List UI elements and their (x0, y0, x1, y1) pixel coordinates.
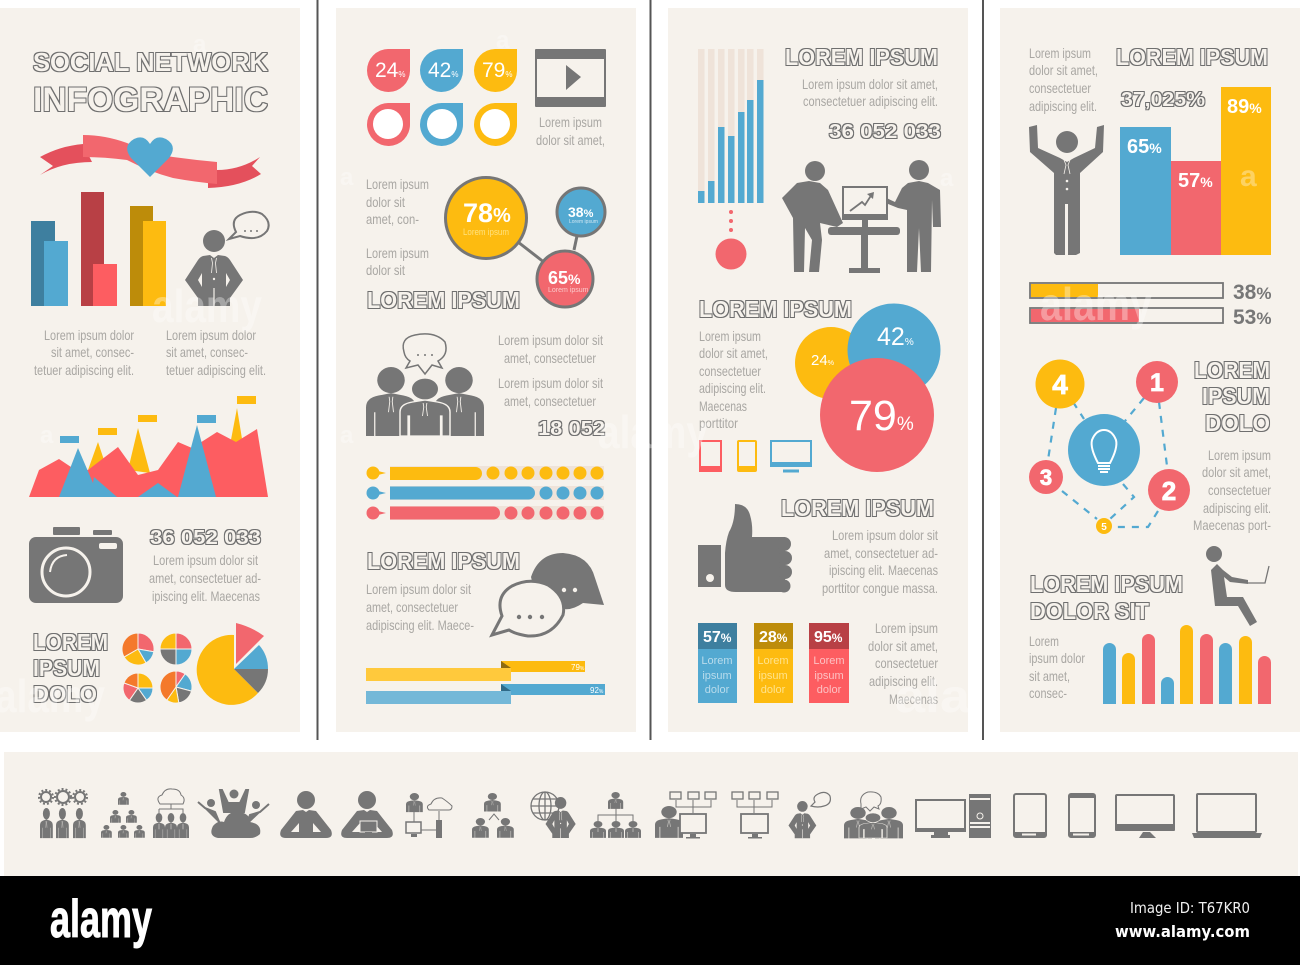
icon: people with gears (39, 789, 87, 838)
text block (868, 620, 938, 707)
icon: desktop computer (915, 794, 991, 838)
text block: consectetuer (1029, 80, 1091, 96)
stat card: 57% (698, 623, 737, 703)
heading: LOREM IPSUM (1030, 571, 1183, 597)
text block: group: amet, consectetuer (504, 393, 596, 409)
process diagram: 1 (1150, 369, 1164, 397)
text block: chat: amet, consectetuer (366, 599, 458, 615)
divider line 2 (650, 0, 652, 740)
icon: people group with speech bubble (366, 334, 484, 436)
heading: lorem ipsum dolo (33, 629, 108, 707)
text block: dolor sit amet, (868, 638, 938, 654)
bubble chart (795, 304, 940, 472)
watermarks: alamy (1040, 278, 1152, 330)
text block: sit amet, (1029, 668, 1070, 684)
bubble diagram: 38% (568, 204, 594, 220)
folded bars: 92% (590, 686, 604, 695)
bubble diagram: Lorem ipsum (569, 219, 598, 225)
panel: results and process (1000, 8, 1300, 732)
text block: video: Lorem ipsum (539, 114, 602, 130)
icon strip (4, 752, 1298, 876)
text block (802, 76, 938, 109)
text block: dolor sit amet, (699, 345, 768, 361)
icon: monitor (1115, 795, 1175, 838)
text block: chat (366, 581, 474, 633)
text block: video: dolor sit amet, (536, 132, 605, 148)
icon: thumbs up (698, 504, 792, 592)
text block: group (498, 332, 603, 409)
bar chart: 65 57 89 (1120, 87, 1271, 255)
text block: consectetuer adipiscing elit. (803, 93, 938, 109)
stat card: 95%: ipsum (814, 670, 844, 682)
text block: circles: dolor sit (366, 194, 405, 210)
bubble chart: 42% (877, 323, 914, 351)
process diagram: 3 (1040, 465, 1052, 490)
heading: IPSUM (1202, 383, 1270, 409)
icon: person, cloud and computer (406, 793, 452, 838)
text block: Lorem ipsum dolor sit (832, 527, 938, 543)
folded bars: 79% (571, 663, 585, 672)
column chart (698, 49, 764, 270)
watermarks: alamy (598, 406, 708, 458)
stat card: 28%: Lorem (757, 655, 789, 667)
heading (1194, 357, 1270, 436)
title: INFOGRAPHIC (33, 81, 268, 119)
progress bars: 38% (1233, 281, 1271, 304)
icon: camera (29, 527, 123, 603)
text block: consectetuer (1208, 482, 1271, 498)
heading: LOREM IPSUM (367, 548, 520, 574)
icon: monitor and network (732, 792, 778, 838)
pie chart: large (197, 623, 268, 705)
icons: devices (700, 441, 811, 471)
bubble diagram: 65% (548, 268, 581, 288)
stat card: 95%: dolor (817, 684, 842, 696)
text block (1029, 45, 1098, 114)
folded bars (366, 661, 605, 704)
watermarks: a (40, 422, 54, 449)
icon: org chart (590, 792, 641, 838)
text block: chat: adipiscing elit. Maece- (366, 617, 474, 633)
text block: Maecenas (889, 691, 938, 707)
text block (822, 527, 938, 596)
text block: right column: Lorem ipsum dolor (166, 327, 256, 343)
text block: camera description: amet, consectetuer ad- (149, 570, 261, 586)
area chart with flags (29, 396, 268, 497)
heading: LOREM IPSUM (367, 287, 520, 313)
icon: globe and person (531, 792, 576, 838)
icon: person with speech bubble (185, 212, 269, 306)
heading: lorem ipsum dolo: DOLO (33, 681, 97, 707)
panel: drops and circles (336, 8, 636, 732)
progress bars: 53% (1233, 306, 1271, 329)
icon: video player (535, 49, 606, 107)
image id: Image ID: T67KR0 (1130, 899, 1250, 917)
icon: three people hierarchy (472, 793, 514, 838)
text block: ipiscing elit. Maecenas (829, 562, 938, 578)
bubble chart: 24% (811, 352, 834, 369)
text block: left column: sit amet, consec- (51, 344, 134, 360)
icon: team celebrating over cloud (198, 790, 269, 838)
bar chart: 65 57 89: 57% (1178, 170, 1213, 192)
text block: dolor sit amet, (1029, 62, 1098, 78)
watermarks: alamy (152, 280, 262, 332)
text block: Lorem ipsum (875, 620, 938, 636)
title (33, 47, 268, 119)
number: 36 052 033 (829, 120, 941, 143)
text block: right column (166, 327, 266, 378)
title: SOCIAL NETWORK (33, 47, 268, 77)
number: 36 052 033 (150, 526, 261, 549)
process diagram: 4 (1052, 369, 1068, 400)
icon: businessman (280, 791, 332, 838)
bubble diagram: Lorem ipsum (548, 287, 589, 294)
website: www.alamy.com (1115, 922, 1250, 941)
drops with percentages (367, 49, 517, 146)
stat card: 57%: dolor (705, 684, 730, 696)
text block: circles: amet, con- (366, 211, 419, 227)
drops with percentages: 42% (428, 59, 458, 82)
text block (1029, 633, 1085, 701)
panel: business scene and circles (668, 8, 968, 732)
progress bars (1030, 281, 1271, 329)
icon: phone (1069, 794, 1095, 837)
stat card: 95%: 95% (814, 629, 843, 646)
watermarks (0, 27, 1257, 722)
pie charts: small (122, 633, 192, 703)
text block: consectetuer (875, 655, 938, 671)
bubble diagram: Lorem ipsum (463, 227, 509, 237)
text block: ipsum dolor (1029, 650, 1085, 666)
watermarks: a (940, 165, 954, 192)
text block: right column: sit amet, consec- (166, 344, 248, 360)
icon: people pyramid (101, 792, 145, 838)
text block: Lorem ipsum dolor sit amet, (802, 76, 938, 92)
divider line 1 (316, 0, 318, 740)
text block: right column: tetuer adipiscing elit. (166, 362, 266, 378)
stat card: 57%: 57% (703, 629, 732, 646)
icon: group with speech bubble (844, 792, 903, 838)
text block: camera description: Lorem ipsum dolor sit (153, 552, 258, 568)
text block: amet, consectetuer ad- (824, 545, 938, 561)
icon: person with arms raised (1029, 125, 1104, 255)
bubble chart: 79% (849, 392, 914, 440)
text block: camera description: ipiscing elit. Maecenas (152, 588, 260, 604)
icon: businessman with monitor (341, 791, 393, 838)
stat card: 95% (809, 623, 849, 703)
text block: adipiscing elit. (1203, 500, 1271, 516)
bar chart: 65 57 89: 65% (1127, 136, 1162, 158)
heading (1030, 571, 1183, 624)
bar chart: 65 57 89: 89% (1227, 96, 1262, 118)
stat card: 28% (754, 623, 793, 703)
bar chart: paired bars (31, 192, 166, 306)
text block: Maecenas port- (1193, 517, 1271, 533)
text block: adipiscing elit. (1029, 98, 1097, 114)
icon: chat bubbles (492, 553, 604, 636)
text block: Lorem (1029, 633, 1059, 649)
text block: circles (366, 176, 429, 278)
icon: two businessmen at chart monitor (782, 160, 941, 273)
text block: group: Lorem ipsum dolor sit (498, 332, 603, 348)
watermarks: ala (895, 670, 970, 722)
text block: dolor sit amet, (1202, 464, 1271, 480)
text block: porttitor (699, 415, 738, 431)
text block: video (536, 114, 605, 148)
process diagram: 5 (1101, 522, 1107, 533)
bubble diagram (446, 178, 605, 307)
text block: adipiscing elit. (699, 380, 766, 396)
heading: lorem ipsum dolo: IPSUM (33, 655, 100, 681)
text block: left column (34, 327, 134, 378)
text block: Lorem ipsum (1208, 447, 1271, 463)
text block: group: amet, consectetuer (504, 350, 596, 366)
stat card: 57%: ipsum (702, 670, 732, 682)
icon: ribbon with heart (40, 135, 261, 188)
text block: circles: Lorem ipsum (366, 245, 429, 261)
alamy logo: alamy (50, 890, 152, 949)
stat card: 28%: ipsum (758, 670, 788, 682)
process diagram (1029, 360, 1190, 534)
icon: laptop (1192, 794, 1262, 838)
number: 18 052 (538, 417, 605, 440)
text block: Lorem ipsum (1029, 45, 1091, 61)
text block: left column: tetuer adipiscing elit. (34, 362, 134, 378)
stat card: 57%: Lorem (701, 655, 733, 667)
process diagram: 2 (1162, 476, 1176, 506)
text block: circles: dolor sit (366, 262, 405, 278)
watermarks: a (1240, 160, 1257, 193)
heading: LOREM IPSUM (699, 296, 852, 322)
text block: consectetuer (699, 363, 761, 379)
divider line 3 (982, 0, 984, 740)
icon: person at laptop (1206, 546, 1269, 626)
icon: tablet (1014, 794, 1046, 837)
text block: camera description (149, 552, 261, 604)
text block: consec- (1029, 685, 1067, 701)
heading: DOLOR SIT (1030, 598, 1149, 624)
watermarks: a (340, 422, 354, 449)
icon: person, monitor and network (655, 792, 716, 838)
progress rows with dots (366, 466, 604, 520)
heading: lorem ipsum dolo: LOREM (33, 629, 108, 655)
footer bar (0, 876, 1300, 965)
panel: social network overview (0, 8, 300, 732)
text block: left column: Lorem ipsum dolor (44, 327, 134, 343)
text block: group: Lorem ipsum dolor sit (498, 375, 603, 391)
heading: LOREM (1194, 357, 1270, 383)
stat card: 28%: dolor (761, 684, 786, 696)
watermarks: a (496, 27, 510, 54)
text block: circles: Lorem ipsum (366, 176, 429, 192)
stat card: 28%: 28% (759, 629, 788, 646)
heading: LOREM IPSUM (781, 495, 934, 521)
drops with percentages: 24% (375, 59, 405, 82)
text block (699, 328, 768, 431)
heading: LOREM IPSUM (785, 44, 938, 70)
text block (1193, 447, 1271, 533)
text block: Maecenas (699, 398, 747, 414)
icon: person with speech bubble (788, 792, 830, 838)
number: 37,025% (1121, 88, 1205, 111)
stat card: 95%: Lorem (813, 655, 845, 667)
bar chart: rounded columns (1103, 625, 1271, 704)
drops with percentages: 79% (482, 59, 512, 82)
bubble diagram: 78% (463, 198, 511, 228)
heading: DOLO (1205, 410, 1270, 436)
text block: Lorem ipsum (699, 328, 761, 344)
icon: cloud with team (153, 789, 189, 838)
text block: chat: Lorem ipsum dolor sit (366, 581, 471, 597)
text block: adipiscing elit. (869, 673, 938, 689)
text block: porttitor congue massa. (822, 580, 938, 596)
watermarks: a (193, 31, 207, 58)
watermarks: a (340, 164, 354, 191)
heading: LOREM IPSUM (1116, 44, 1268, 70)
